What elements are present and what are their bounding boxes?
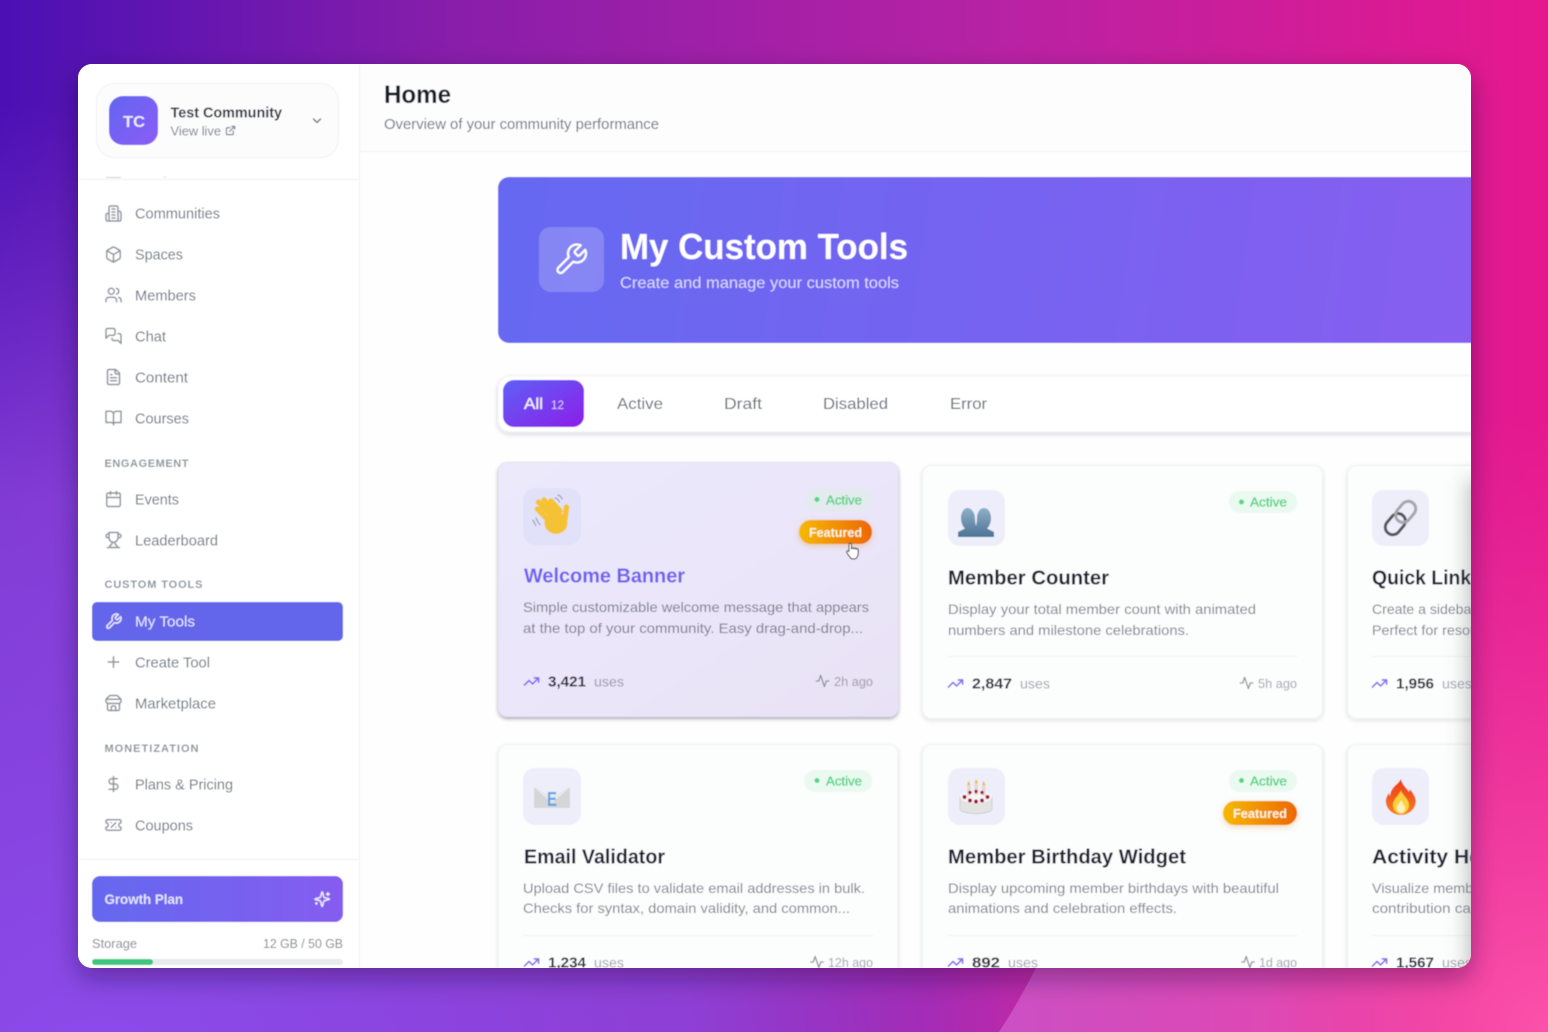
nav item: Members: Members bbox=[135, 288, 196, 304]
card: Member Counter bbox=[922, 466, 1322, 718]
banner subtitle: Create and manage your custom tools bbox=[620, 275, 899, 292]
tab: Disabled: Disabled bbox=[823, 396, 888, 413]
growth plan button: Growth Plan bbox=[104, 891, 183, 907]
nav item: Events bbox=[107, 492, 179, 508]
card description: Simple customizable welcome message that appears bbox=[523, 599, 869, 615]
community avatar: TC bbox=[123, 114, 145, 131]
card title: Quick Links bbox=[1372, 566, 1482, 590]
status badge bbox=[1229, 491, 1297, 513]
tab: Error: Error bbox=[950, 396, 988, 413]
page title: Home bbox=[384, 81, 451, 109]
usage stat: 892 bbox=[972, 956, 1000, 972]
usage stat: 1,956 bbox=[1396, 676, 1434, 692]
card description: numbers and milestone celebrations. bbox=[948, 622, 1189, 638]
nav item: Chat bbox=[106, 328, 166, 346]
usage stat bbox=[1372, 954, 1472, 972]
card description: Perfect for resources bbox=[1372, 622, 1505, 638]
last activity: 5h ago bbox=[1258, 677, 1297, 691]
tab: All (selected): All bbox=[524, 396, 543, 413]
icon: waving hand bbox=[523, 488, 581, 545]
icon: hand cursor bbox=[847, 543, 858, 559]
usage stat: uses bbox=[594, 674, 624, 690]
card title: Email Validator bbox=[524, 846, 665, 868]
usage stat: 1,234 bbox=[548, 956, 586, 972]
nav item: Communities: Communities bbox=[135, 206, 220, 222]
nav item: Marketplace: Marketplace bbox=[135, 696, 216, 712]
icon: wrench tile bbox=[539, 227, 604, 292]
usage stat bbox=[1371, 678, 1471, 692]
nav item: Content bbox=[108, 370, 188, 386]
icon: birthday cake bbox=[948, 768, 1005, 825]
status badge: Active bbox=[1250, 496, 1287, 510]
card description: Checks for syntax, domain validity, and common... bbox=[523, 900, 850, 916]
usage stat bbox=[524, 954, 624, 972]
icon: link bbox=[1372, 490, 1429, 546]
last activity: 1d ago bbox=[1259, 956, 1297, 970]
nav item: Coupons: Coupons bbox=[135, 818, 193, 834]
card description: Create a sidebar bbox=[1372, 601, 1476, 617]
card description bbox=[523, 599, 869, 636]
page header bbox=[384, 84, 659, 132]
community name: Test Community bbox=[170, 106, 282, 122]
card: Activity Heatmap bbox=[1348, 744, 1548, 998]
main content area bbox=[498, 176, 1471, 718]
card description: Display your total member count with animated bbox=[948, 601, 1256, 617]
storage meter: 12 GB / 50 GB bbox=[263, 937, 343, 951]
nav item: Chat: Chat bbox=[135, 330, 166, 346]
featured badge: Featured bbox=[1233, 807, 1287, 821]
nav item: Create Tool: Create Tool bbox=[135, 656, 210, 672]
usage stat bbox=[948, 954, 1038, 972]
community switcher bbox=[78, 84, 359, 180]
last activity bbox=[816, 675, 873, 689]
card title: Welcome Banner bbox=[524, 564, 685, 588]
card title: Member Counter bbox=[948, 566, 1109, 590]
card title: Activity Heatmap bbox=[1372, 846, 1543, 868]
featured badge bbox=[799, 520, 872, 544]
last activity bbox=[1242, 956, 1297, 970]
section heading: Custom Tools: CUSTOM TOOLS bbox=[104, 579, 202, 591]
nav item: Plans & Pricing: Plans & Pricing bbox=[135, 778, 233, 794]
nav item: Spaces bbox=[107, 247, 183, 264]
card: Quick Links bbox=[1346, 464, 1471, 722]
icon: chevron bbox=[314, 119, 320, 122]
status badge bbox=[804, 770, 872, 792]
card: Email Validator bbox=[496, 744, 900, 968]
nav item: Events: Events bbox=[135, 492, 179, 508]
card description bbox=[1372, 604, 1471, 636]
nav item: Coupons bbox=[106, 818, 193, 834]
growth plan button bbox=[92, 876, 343, 922]
section heading: Monetization: MONETIZATION bbox=[104, 743, 199, 755]
community avatar bbox=[109, 96, 158, 145]
nav item: My Tools (active) bbox=[92, 602, 343, 641]
nav item: Members bbox=[106, 288, 196, 304]
nav item: Marketplace bbox=[106, 696, 216, 712]
featured badge bbox=[1223, 801, 1297, 825]
usage stat bbox=[523, 676, 624, 690]
icon: busts in silhouette bbox=[948, 490, 1005, 546]
card description: animations and celebration effects. bbox=[948, 900, 1177, 916]
section heading: Engagement: ENGAGEMENT bbox=[104, 458, 189, 470]
usage stat: 2,847 bbox=[972, 676, 1012, 692]
card: Member Birthday Widget bbox=[922, 744, 1322, 998]
usage stat: uses bbox=[1020, 676, 1050, 692]
tab: Draft: Draft bbox=[724, 396, 763, 413]
status badge: Active bbox=[826, 494, 862, 508]
card: Welcome Banner (hovered) bbox=[498, 462, 898, 716]
last activity: 2h ago bbox=[834, 675, 873, 689]
card description: Visualize member bbox=[1372, 880, 1486, 896]
card description: Upload CSV files to validate email addresses in bulk. bbox=[523, 880, 865, 896]
storage meter bbox=[92, 937, 343, 965]
card description: Display upcoming member birthdays with beautiful bbox=[948, 880, 1279, 896]
icon: e-mail envelope: E bbox=[547, 789, 557, 811]
usage stat: uses bbox=[1442, 954, 1472, 970]
banner heading: My Custom Tools bbox=[620, 226, 908, 267]
icon: fire bbox=[1372, 768, 1429, 825]
usage stat bbox=[947, 678, 1050, 692]
view live link: View live bbox=[170, 124, 221, 138]
tab: Active: Active bbox=[617, 396, 663, 413]
last activity bbox=[1240, 677, 1297, 691]
card description: contribution calendar bbox=[1372, 900, 1513, 916]
tab: All (selected) bbox=[503, 380, 584, 427]
status badge: Active bbox=[1250, 774, 1287, 788]
card description bbox=[948, 604, 1256, 636]
card title: Member Birthday Widget bbox=[948, 846, 1186, 868]
page subtitle: Overview of your community performance bbox=[384, 117, 659, 133]
nav item: Spaces: Spaces bbox=[135, 248, 183, 264]
sidebar bbox=[78, 64, 360, 968]
nav item: Courses bbox=[106, 411, 189, 428]
status badge: Active bbox=[826, 774, 862, 788]
last activity: 12h ago bbox=[828, 956, 873, 970]
tab: All (selected): 12 bbox=[551, 398, 564, 412]
usage stat: 3,421 bbox=[548, 674, 586, 690]
nav item: Content: Content bbox=[135, 370, 188, 386]
card description bbox=[523, 880, 865, 916]
hero banner bbox=[498, 177, 1548, 343]
card description bbox=[1372, 880, 1513, 916]
nav item: Courses: Courses bbox=[135, 412, 189, 428]
card description bbox=[948, 880, 1279, 916]
nav item: Leaderboard: Leaderboard bbox=[135, 534, 218, 550]
usage stat: uses bbox=[1442, 676, 1472, 692]
usage stat: uses bbox=[1008, 954, 1038, 970]
card description: at the top of your community. Easy drag-and-drop... bbox=[523, 620, 863, 636]
storage meter: Storage bbox=[92, 937, 137, 951]
filter tabs bbox=[498, 376, 1548, 432]
nav item: Leaderboard bbox=[106, 532, 218, 550]
status badge bbox=[804, 489, 872, 511]
featured badge: Featured bbox=[809, 526, 862, 540]
usage stat: 1,567 bbox=[1396, 956, 1434, 972]
usage stat: uses bbox=[594, 954, 624, 970]
nav item: My Tools (active): My Tools bbox=[135, 614, 195, 630]
icon: e-mail envelope bbox=[523, 768, 581, 825]
status badge bbox=[1229, 770, 1297, 792]
